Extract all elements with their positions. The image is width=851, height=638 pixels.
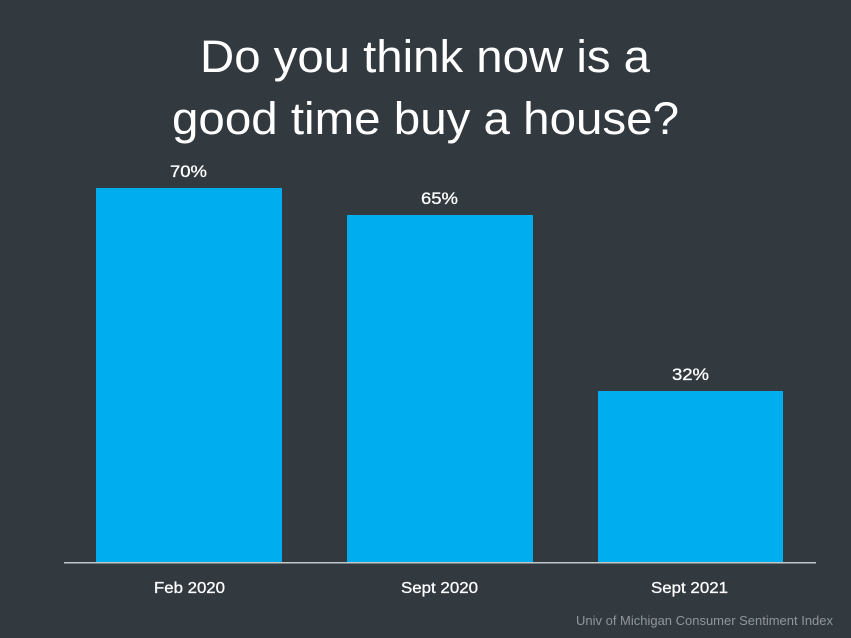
bar chart [64,162,816,597]
value label: 65%: 65% [421,189,458,208]
title [172,31,679,144]
baseline axis [64,562,816,564]
bar: Sept 2021 [598,391,783,563]
category label: Sept 2021: Sept 2021 [651,580,728,597]
source note: Univ of Michigan Consumer Sentiment Index [576,613,833,628]
value label: 32%: 32% [672,365,709,384]
value label: 70%: 70% [170,162,207,181]
category label: Feb 2020: Feb 2020 [154,580,225,597]
bar: Feb 2020 [96,188,282,563]
bar: Sept 2020 [347,215,533,563]
title: good time buy a house? [172,93,679,144]
title: Do you think now is a [200,31,651,82]
category label: Sept 2020: Sept 2020 [401,580,478,597]
